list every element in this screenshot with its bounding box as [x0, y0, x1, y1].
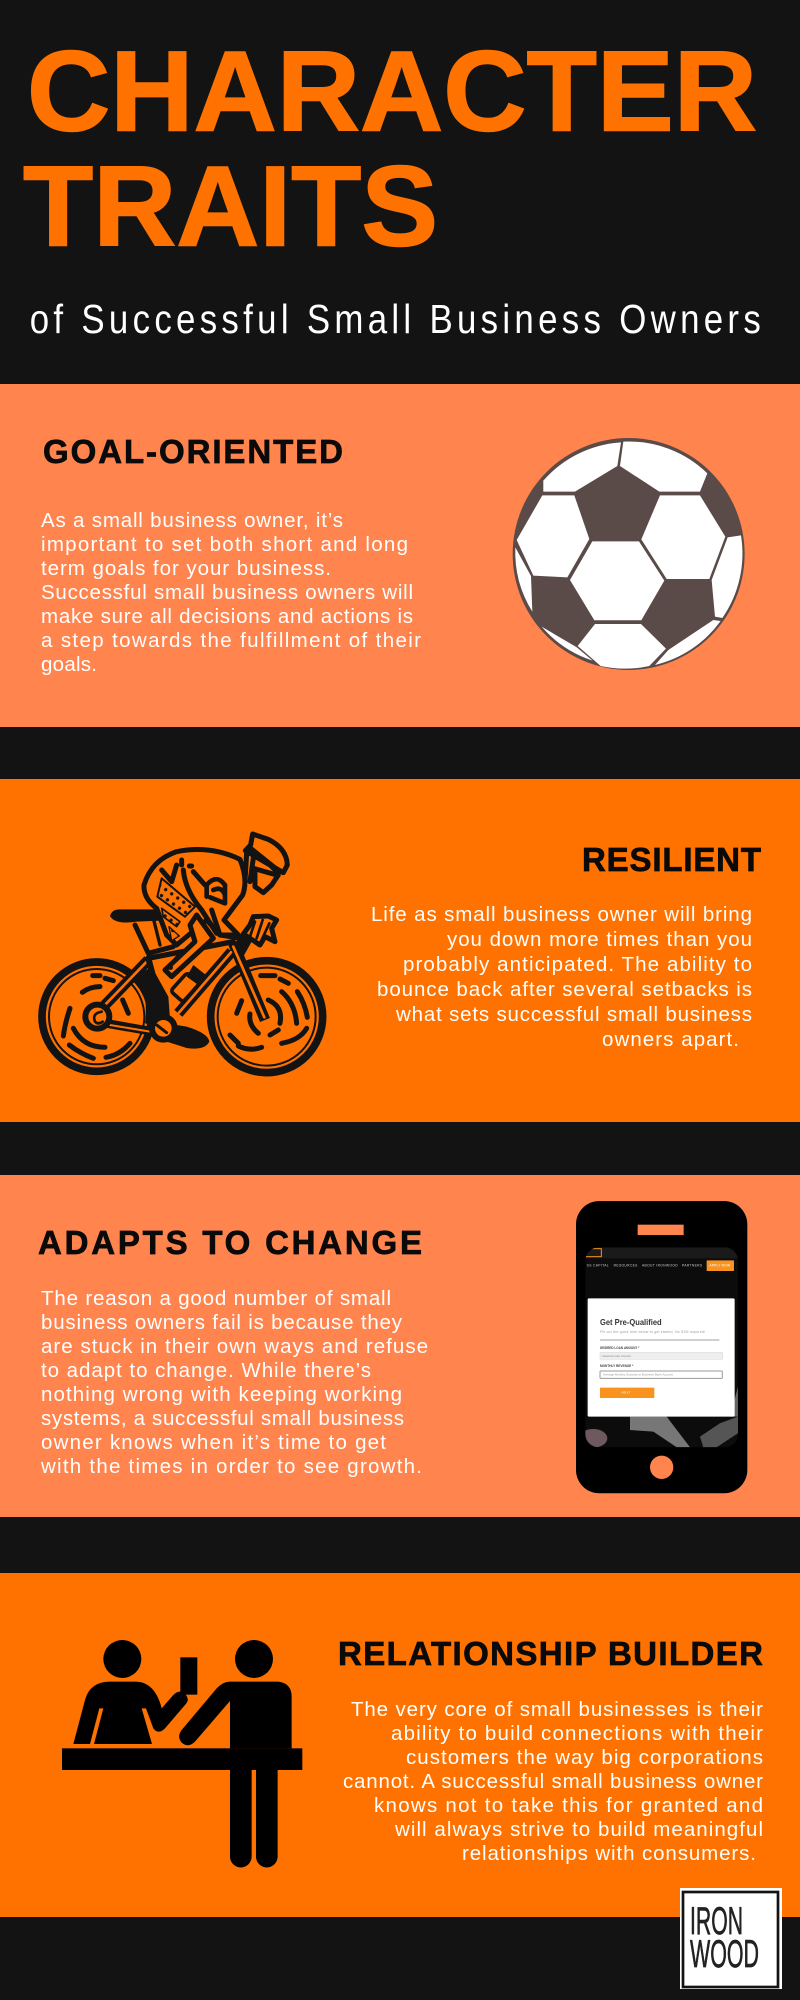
text block: goal-oriented: a step towards the fulfillment of their	[41, 629, 421, 652]
text block: relationship builder: ability to build connections with their	[391, 1722, 763, 1745]
text block: relationship builder: cannot. A successful small business owner	[343, 1770, 763, 1793]
text block: adapts to change: owner knows when it’s time to get	[41, 1431, 386, 1454]
text block: relationship builder: customers the way big corporations	[406, 1746, 763, 1769]
icon: phone with web form: RESOURCES	[614, 1264, 638, 1268]
icon: phone with web form: NEXT	[622, 1391, 631, 1395]
text block: resilient: owners apart.	[602, 1028, 739, 1051]
icon: two people at a counter	[62, 1640, 302, 1867]
panel: resilient	[0, 779, 800, 1122]
logo: Ironwood	[680, 1888, 782, 1989]
text block: goal-oriented: goals.	[41, 653, 97, 676]
panel: relationship builder	[0, 1573, 800, 1917]
text block: adapts to change	[40, 1287, 428, 1478]
heading: adapts to change: ADAPTS TO CHANGE	[38, 1224, 422, 1261]
hand	[243, 916, 277, 945]
icon: phone with web form: Average Monthly Deposits to Business Bank Account	[603, 1373, 673, 1377]
icon: phone with web form: Get Pre-Qualified	[600, 1317, 662, 1327]
bottle	[171, 972, 200, 1002]
shorts	[157, 878, 195, 917]
panel: adapts to change	[0, 1175, 800, 1517]
saddle	[110, 909, 162, 923]
text block: resilient: what sets successful small business	[395, 1003, 752, 1026]
text block: resilient: probably anticipated. The ability to	[403, 953, 752, 976]
arm	[207, 879, 225, 903]
text block: resilient: Life as small business owner will bring	[371, 903, 752, 926]
icon: phone with web form: PARTNERS	[682, 1264, 703, 1268]
subtitle: of Successful Small Business Owners	[30, 297, 761, 343]
text block: adapts to change: business owners fail is because they	[41, 1311, 403, 1334]
heading: goal-oriented: GOAL-ORIENTED	[43, 433, 343, 470]
text block: goal-oriented: term goals for your business.	[41, 557, 331, 580]
text block: relationship builder: The very core of small businesses is their	[351, 1698, 763, 1721]
icon: phone with web form	[576, 1201, 747, 1493]
icon: phone with web form: DESIRED LOAN AMOUNT *	[600, 1346, 640, 1350]
icon: phone with web form: Fill out the quick form below to get started. No SSN required!	[600, 1330, 705, 1334]
icon: phone with web form: APPLY NOW	[709, 1264, 731, 1268]
text block: relationship builder: knows not to take this for granted and	[374, 1794, 763, 1817]
text block: goal-oriented: As a small business owner, it’s	[41, 509, 343, 532]
text block: adapts to change: with the times in order to see growth.	[40, 1455, 422, 1478]
helmet and face	[245, 834, 287, 873]
text block: relationship builder: relationships with consumers.	[462, 1842, 756, 1865]
leg shadow and foot	[138, 967, 209, 1049]
bike frame	[103, 918, 265, 1032]
text block: goal-oriented: Successful small business owners will	[41, 581, 413, 604]
panel: goal-oriented	[0, 384, 800, 727]
rider torso	[144, 850, 245, 945]
text block: resilient	[371, 903, 752, 1051]
text block: relationship builder: will always strive to build meaningful	[394, 1818, 763, 1841]
title: CHARACTER	[27, 28, 757, 156]
icon: cyclist	[42, 834, 323, 1073]
icon: phone with web form: SS CAPITAL	[587, 1264, 609, 1268]
title: TRAITS	[23, 144, 438, 270]
rear wheel	[42, 962, 151, 1071]
text block: adapts to change: are stuck in their own ways and refuse	[41, 1335, 428, 1358]
logo: Ironwood: IRON	[690, 1900, 743, 1943]
icon: phone with web form: ABOUT IRONWOOD	[642, 1264, 678, 1268]
text block: relationship builder	[343, 1698, 763, 1865]
text block: adapts to change: to adapt to change. While there’s	[41, 1359, 371, 1382]
text block: adapts to change: The reason a good number of small	[41, 1287, 391, 1310]
text block: goal-oriented: important to set both short and long	[41, 533, 408, 556]
text block: resilient: you down more times than you	[447, 928, 752, 951]
text block: goal-oriented: make sure all decisions and actions is	[41, 605, 413, 628]
text block: adapts to change: systems, a successful small business	[41, 1407, 404, 1430]
front wheel	[211, 961, 323, 1073]
text block: adapts to change: nothing wrong with keeping working	[41, 1383, 402, 1406]
text block: resilient: bounce back after several setbacks is	[377, 978, 752, 1001]
icon: phone with web form: Desired Loan Amount	[602, 1354, 631, 1358]
heading: resilient: RESILIENT	[582, 841, 761, 878]
heading: relationship builder: RELATIONSHIP BUILDER	[338, 1635, 763, 1672]
icon: phone with web form: MONTHLY REVENUE *	[600, 1364, 634, 1368]
hub and crank	[85, 1005, 175, 1040]
text block: goal-oriented	[41, 509, 421, 676]
thigh	[165, 915, 213, 977]
icon: soccer ball	[513, 438, 745, 670]
title	[23, 28, 757, 270]
